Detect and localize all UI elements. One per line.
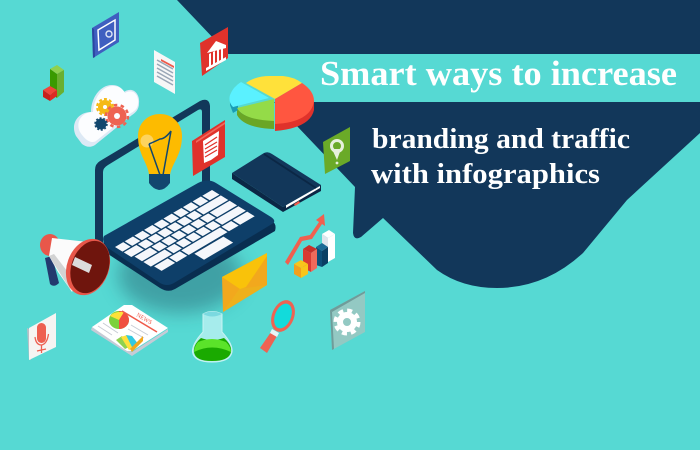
icon: flask: [192, 312, 232, 362]
icon: newspaper: [91, 305, 168, 356]
icon: green bar and red cube: [43, 65, 64, 101]
pie slice: green: [237, 99, 274, 121]
pie depth: cyan: [230, 97, 238, 113]
icon: notebook: [232, 152, 321, 212]
pie slice: yellow: [246, 76, 302, 99]
megaphone cone: [49, 238, 97, 292]
megaphone bell: [58, 233, 118, 301]
gear: red: [106, 105, 128, 127]
megaphone back: [40, 234, 60, 256]
newspaper pie: [109, 311, 129, 329]
gear: yellow: [97, 99, 113, 115]
icon: gear card: [330, 291, 365, 350]
title line 2: branding and traffic: [372, 123, 630, 155]
megaphone handle: [45, 256, 59, 286]
icon: growth chart: [285, 214, 335, 278]
icon: microphone card: [27, 313, 56, 360]
laptop screen frame: [95, 100, 210, 250]
chart bar: red: [303, 245, 317, 272]
title line 1: Smart ways to increase: [320, 54, 677, 93]
laptop base side: [104, 184, 276, 291]
laptop base top: [103, 180, 274, 285]
chart bar: yellow: [294, 260, 308, 278]
icon: megaphone: [40, 233, 118, 301]
pie depth: green: [237, 108, 274, 129]
laptop: [95, 100, 276, 291]
navy speech bubble background: [177, 0, 700, 288]
icon: light bulb: [138, 114, 182, 190]
newspaper bars: [116, 335, 143, 352]
pie slice: red: [275, 83, 314, 124]
title line 3: with infographics: [371, 158, 600, 190]
newspaper heading: NEWS: [135, 313, 153, 326]
icon: envelope: [222, 253, 267, 312]
pie slice: cyan: [229, 82, 269, 107]
icon: document sheet: [154, 50, 175, 94]
chart arrow: [285, 214, 325, 265]
icon: red document card: [192, 120, 225, 176]
teal title band: [228, 54, 700, 102]
chart bar: blue: [316, 243, 328, 267]
icon: safe card: [92, 12, 119, 58]
icon: bank card: [200, 27, 228, 76]
icon: magnifier: [260, 297, 299, 353]
gear: navy: [95, 118, 107, 130]
icon: cloud with gears: [74, 85, 139, 147]
keyboard keys: [115, 190, 266, 280]
pie chart: [229, 76, 314, 131]
laptop shadow: [118, 237, 242, 313]
icon: green pin card: [323, 127, 350, 174]
chart bar: white: [322, 230, 335, 262]
pie depth: red: [275, 100, 314, 131]
